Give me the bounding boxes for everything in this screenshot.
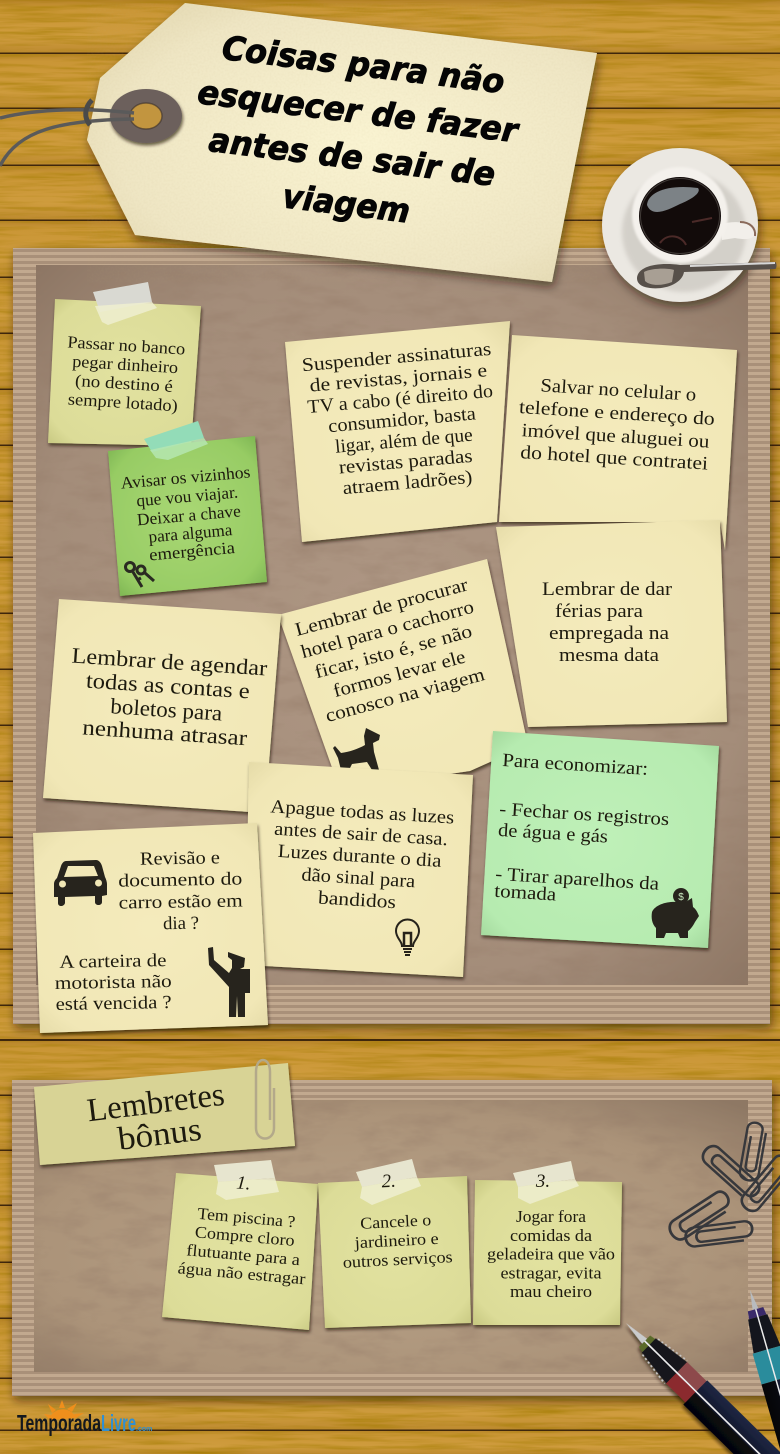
icon: piggy bank with coin xyxy=(652,888,699,938)
note: vizinhos: emergência xyxy=(148,538,236,564)
note: assinaturas: de revistas, jornais e xyxy=(309,360,488,397)
note: hotel cachorro xyxy=(278,559,528,790)
note: bônus 3 geladeira: mau cheiro xyxy=(510,1282,592,1301)
logo: TemporadaLivre: Livre xyxy=(101,1410,136,1436)
title: esquecer de fazer xyxy=(195,72,521,150)
note: economizar: de água e gás xyxy=(497,820,608,848)
panel: main corkboard xyxy=(13,248,770,1024)
note: banco: (no destino é xyxy=(75,371,174,396)
note: celular: Salvar no celular o xyxy=(540,375,697,406)
note: carro e carteira: A carteira de xyxy=(59,951,167,973)
note: férias empregada: mesma data xyxy=(559,645,660,666)
note: economizar: Para economizar: xyxy=(502,750,649,780)
icon: keys xyxy=(126,562,154,587)
note: vizinhos: Deixar a chave xyxy=(136,501,241,529)
note: contas boletos: Lembrar de agendar xyxy=(71,643,269,681)
note: lembretes bônus heading: Lembretes xyxy=(85,1077,226,1129)
icon: pen red xyxy=(613,1312,780,1454)
note: luzes: Apague todas as luzes xyxy=(270,796,455,829)
note: vizinhos xyxy=(108,421,267,596)
note: vizinhos: para alguma xyxy=(148,520,234,546)
note: carro e carteira xyxy=(33,823,268,1033)
icon: traffic officer xyxy=(208,947,250,1017)
note: celular: do hotel que contratei xyxy=(520,442,709,475)
note: celular xyxy=(499,335,737,550)
icon: coffee cup on saucer xyxy=(602,148,776,302)
title: Coisas para não xyxy=(220,28,507,101)
note: luzes: antes de sair de casa. xyxy=(274,819,448,850)
note: economizar: - Fechar os registros xyxy=(499,799,670,830)
icon: piggy bank with coin: $ xyxy=(678,892,684,903)
note: assinaturas xyxy=(285,321,510,542)
logo: TemporadaLivre: .com xyxy=(136,1426,152,1433)
note: contas boletos: boletos para xyxy=(110,693,223,726)
note: férias empregada: Lembrar de dar xyxy=(542,579,673,600)
note: bônus 2 jardineiro xyxy=(318,1159,471,1328)
icon: tape xyxy=(356,1159,421,1205)
note: hotel cachorro: hotel para o cachorro xyxy=(299,597,476,663)
icon: paper clips xyxy=(666,1122,780,1247)
note: celular: telefone e endereço do xyxy=(518,397,715,430)
title: antes de sair de xyxy=(207,120,497,194)
note: hotel cachorro: conosco na viagem xyxy=(323,664,487,727)
note: bônus 1 piscina: flutuante para a xyxy=(186,1240,302,1269)
note: carro e carteira: documento do xyxy=(118,869,242,892)
note: hotel cachorro: Lembrar de procurar xyxy=(293,574,471,641)
note: contas boletos: nenhuma atrasar xyxy=(82,714,249,750)
note: contas boletos xyxy=(43,599,281,813)
icon: pen teal xyxy=(736,1286,780,1454)
note: banco: Passar no banco xyxy=(67,332,186,359)
icon: sun xyxy=(44,1400,84,1420)
note: bônus 1 piscina xyxy=(162,1160,318,1330)
note: hotel cachorro: ficar, isto é, se não xyxy=(313,621,474,683)
note: bônus 2 jardineiro: 2. xyxy=(381,1171,396,1192)
note: bônus 1 piscina: água não estragar xyxy=(177,1258,307,1288)
note: assinaturas: TV a cabo (é direito do xyxy=(307,381,494,418)
title xyxy=(184,26,527,243)
note: bônus 3 geladeira: geladeira que vão xyxy=(487,1245,615,1264)
note: férias empregada: férias para xyxy=(555,601,644,622)
note: carro e carteira: está vencida ? xyxy=(55,993,172,1015)
note: lembretes bônus heading: bônus xyxy=(116,1112,204,1158)
icon: tape green xyxy=(144,421,208,460)
note: bônus 1 piscina: Tem piscina ? xyxy=(197,1204,296,1231)
note: economizar: tomada xyxy=(494,881,557,906)
icon: tape xyxy=(93,282,157,325)
note: bônus 1 piscina: Compre cloro xyxy=(194,1222,295,1250)
note: bônus 3 geladeira: estragar, evita xyxy=(500,1263,602,1282)
note: vizinhos: que vou viajar. xyxy=(136,483,239,510)
icon: car xyxy=(54,860,107,906)
note: bônus 3 geladeira: comidas da xyxy=(510,1226,593,1245)
logo: TemporadaLivre xyxy=(17,1400,152,1436)
note: luzes: bandidos xyxy=(317,887,397,913)
note: assinaturas: revistas paradas xyxy=(338,446,473,478)
panel: bonus corkboard xyxy=(12,1080,772,1396)
note: contas boletos: todas as contas e xyxy=(85,668,251,703)
note: hotel cachorro: formos levar ele xyxy=(331,647,468,702)
note: bônus 2 jardineiro: jardineiro e xyxy=(353,1229,439,1252)
logo: TemporadaLivre: Temporada xyxy=(17,1410,101,1436)
note: luzes: Luzes durante o dia xyxy=(277,841,443,872)
note: férias empregada xyxy=(496,520,727,727)
icon: tape xyxy=(513,1161,579,1204)
note: carro e carteira: dia ? xyxy=(163,914,199,934)
note: banco: pegar dinheiro xyxy=(72,352,179,377)
note: bônus 1 piscina: 1. xyxy=(235,1172,251,1195)
note: carro e carteira: motorista não xyxy=(55,972,172,994)
note: bônus 3 geladeira xyxy=(473,1161,622,1325)
note: vizinhos: Avisar os vizinhos xyxy=(120,462,251,493)
note: economizar: - Tirar aparelhos da xyxy=(495,864,660,895)
note: lembretes bônus heading xyxy=(34,1060,295,1165)
icon: tag eyelet and string xyxy=(0,89,182,166)
icon: tape xyxy=(214,1160,279,1200)
note: bônus 3 geladeira: 3. xyxy=(535,1171,550,1192)
panel: title tag xyxy=(0,3,597,282)
note: assinaturas: consumidor, basta xyxy=(327,403,477,437)
note: luzes: dão sinal para xyxy=(301,864,416,892)
note: bônus 2 jardineiro: Cancele o xyxy=(360,1210,432,1233)
icon: dog xyxy=(333,728,380,770)
icon: paperclip xyxy=(256,1060,274,1138)
note: bônus 2 jardineiro: outros serviços xyxy=(342,1247,453,1272)
title: viagem xyxy=(280,176,412,231)
note: assinaturas: ligar, além de que xyxy=(334,425,473,458)
note: economizar xyxy=(481,731,719,948)
note: assinaturas: atraem ladrões) xyxy=(342,467,473,499)
note: carro e carteira: carro estão em xyxy=(119,891,244,914)
note: bônus 3 geladeira: Jogar fora xyxy=(516,1207,587,1226)
note: celular: imóvel que aluguei ou xyxy=(521,420,711,453)
note: banco: sempre lotado) xyxy=(67,390,178,415)
icon: light bulb xyxy=(396,920,419,955)
note: assinaturas: Suspender assinaturas xyxy=(301,339,492,376)
note: férias empregada: empregada na xyxy=(549,623,670,644)
note: carro e carteira: Revisão e xyxy=(140,848,220,870)
note: luzes xyxy=(245,762,473,977)
note: banco xyxy=(48,282,201,446)
